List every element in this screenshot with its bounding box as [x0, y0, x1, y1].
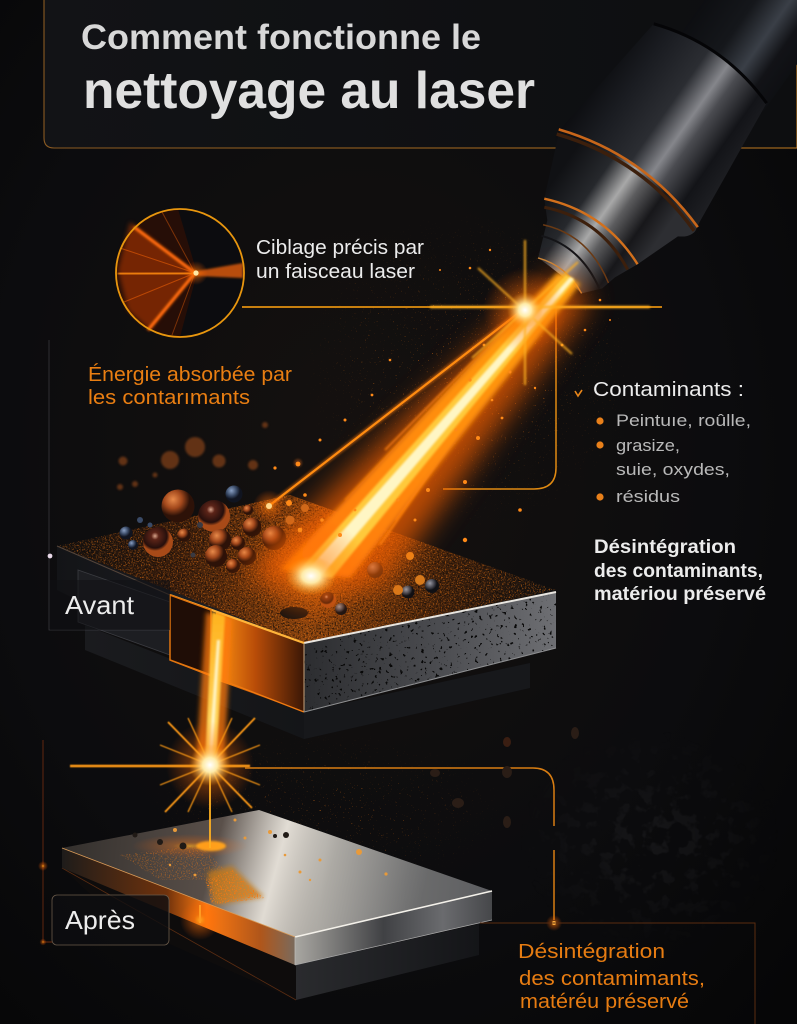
inset fan glow	[115, 209, 197, 337]
block left face	[57, 546, 304, 712]
lower edge glow	[180, 900, 220, 940]
block plinth	[85, 625, 530, 739]
floating debris	[430, 727, 579, 828]
inset circle: targeting detail	[115, 209, 244, 337]
nozzle upper body	[552, 5, 786, 238]
plate right face	[295, 891, 492, 965]
orange cut panel	[170, 595, 211, 675]
callout text: matéréu préservé	[520, 991, 689, 1013]
Après text: Après	[65, 905, 135, 935]
plate top	[62, 810, 492, 937]
white line 3: matériou préservé	[594, 584, 766, 605]
plate left face	[62, 848, 295, 965]
orange cut glow	[216, 612, 304, 712]
impact spot	[196, 841, 226, 851]
debris right of beam	[367, 562, 383, 578]
list items: résidus	[616, 487, 680, 506]
leader line: result	[245, 768, 562, 931]
thin beam impact glow	[253, 490, 285, 522]
list items: Peintuıe, roûlle,	[616, 411, 751, 430]
block top surface	[57, 495, 556, 643]
label: Avant	[50, 580, 170, 630]
list items: suie, oxydes,	[616, 460, 730, 479]
laser nozzle	[489, 0, 797, 326]
nozzle top tube	[672, 0, 797, 112]
inset rays	[118, 212, 195, 335]
targeting line 2: un faisceau laser	[256, 261, 415, 283]
targeting line 1: Ciblage précis par	[256, 237, 424, 259]
energy line 1: Énergie absorbée par	[88, 363, 292, 386]
title line 1: Comment fonctionne le	[81, 18, 481, 57]
text: disintegration white	[594, 537, 766, 605]
plate highlight	[62, 810, 492, 937]
list marker	[575, 390, 582, 396]
nozzle middle cone	[519, 118, 706, 285]
beam glow	[240, 272, 590, 590]
beam white core	[306, 277, 574, 575]
label: Après	[52, 895, 169, 945]
bullets	[596, 417, 604, 501]
surface impact flare	[256, 516, 368, 628]
callout text: Désintégration	[518, 941, 665, 963]
left guide lines	[38, 340, 170, 946]
energy line 2: les contarımants	[88, 387, 250, 409]
callout text	[518, 941, 705, 1013]
beam orange body	[280, 272, 580, 578]
nozzle lower stage	[512, 189, 644, 310]
Avant text: Avant	[65, 590, 135, 620]
upper plate	[62, 810, 492, 1000]
white line 2: des contaminants,	[594, 561, 763, 582]
glass cut section	[78, 570, 170, 655]
blurred particles	[117, 422, 302, 490]
contaminant particles	[117, 422, 439, 619]
text: targeting	[256, 237, 424, 283]
main laser beam	[240, 272, 590, 628]
beam to plate	[209, 765, 211, 848]
beam yellow core	[298, 274, 575, 578]
callout text: des contamimants,	[519, 968, 705, 990]
lower laser flare	[70, 718, 260, 848]
plate debris	[132, 832, 289, 850]
ambient sparks texture	[150, 210, 780, 950]
panel: result callout	[480, 923, 755, 1024]
panel: contaminants list	[575, 379, 751, 506]
text: energy absorbed	[88, 363, 292, 409]
leader line: targeting	[242, 306, 662, 489]
lower block	[57, 495, 556, 739]
orange ring 2	[544, 189, 644, 264]
spheres	[162, 490, 194, 522]
orange residue	[120, 845, 235, 880]
block bright edges	[304, 592, 556, 643]
title line 2: nettoyage au laser	[83, 62, 535, 120]
list heading: Contaminants :	[593, 379, 744, 401]
thin secondary beam	[270, 308, 525, 505]
vertical beam through block	[196, 612, 232, 765]
hand-placed sparks	[273, 249, 611, 542]
title	[81, 18, 535, 120]
plate bright edges	[295, 891, 492, 937]
nozzle tip glow	[536, 254, 586, 293]
block right face	[304, 592, 556, 712]
orange ring 1	[559, 118, 706, 227]
upper laser flare	[430, 240, 650, 385]
list items	[616, 411, 751, 506]
plate plinth	[62, 868, 479, 1000]
header panel	[44, 0, 797, 148]
beam fan streaks	[330, 312, 535, 570]
list items: grasize,	[616, 436, 680, 455]
white line 1: Désintégration	[594, 537, 736, 558]
